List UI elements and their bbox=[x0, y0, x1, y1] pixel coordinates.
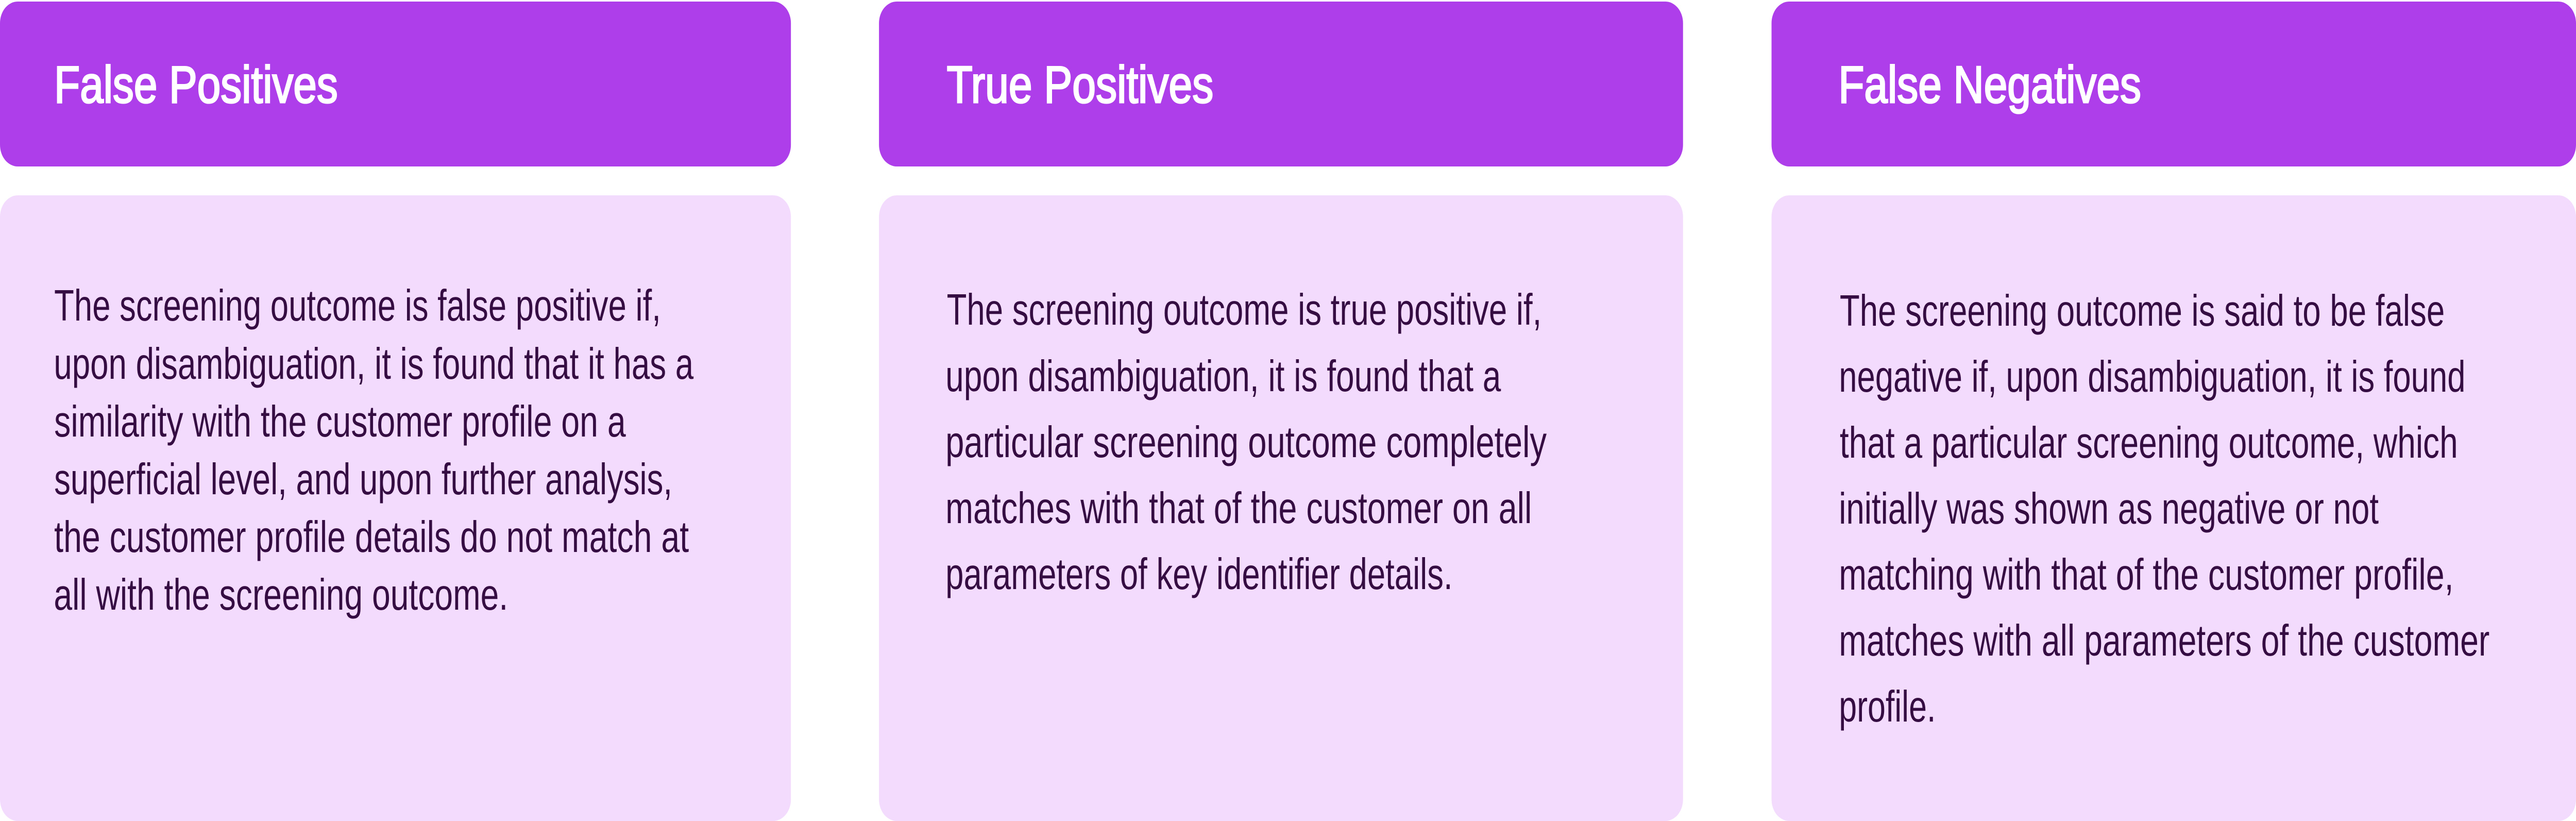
body text: False Positives bbox=[54, 282, 694, 619]
heading: False Positives: False Positives bbox=[54, 55, 338, 114]
body text: True Positives: matches with that of the customer on all bbox=[945, 484, 1532, 533]
panel: False Negatives bbox=[1772, 2, 2576, 821]
header bar: False Negatives bbox=[1772, 2, 2576, 166]
panel: False Positives bbox=[0, 2, 791, 821]
heading: True Positives: True Positives bbox=[947, 55, 1213, 114]
body text: True Positives: upon disambiguation, it is found that a bbox=[945, 353, 1501, 401]
body text: True Positives: The screening outcome is true positive if, bbox=[947, 286, 1541, 334]
panel: True Positives bbox=[879, 2, 1683, 821]
header bar: True Positives bbox=[879, 2, 1683, 166]
body text: False Positives: upon disambiguation, it is found that it has a bbox=[54, 340, 694, 389]
body text: False Positives: superficial level, and upon further analysis, bbox=[54, 456, 672, 504]
body text: False Positives: all with the screening outcome. bbox=[54, 571, 508, 619]
body card: False Positives bbox=[0, 195, 791, 821]
body text: False Negatives: The screening outcome is said to be false bbox=[1840, 287, 2445, 336]
body text: False Positives: the customer profile details do not match at bbox=[54, 513, 689, 562]
body text: False Negatives: matches with all parameters of the customer bbox=[1839, 617, 2489, 665]
body text: False Negatives: that a particular screening outcome, which bbox=[1840, 419, 2458, 467]
body text: True Positives: parameters of key identifier details. bbox=[945, 550, 1453, 599]
body card: False Negatives bbox=[1772, 195, 2576, 821]
body text: False Positives: The screening outcome is false positive if, bbox=[54, 282, 661, 330]
body text: False Negatives: negative if, upon disambiguation, it is found bbox=[1839, 353, 2466, 401]
body text: False Negatives: matching with that of the customer profile, bbox=[1839, 551, 2453, 599]
header bar: False Positives bbox=[0, 2, 791, 166]
body text: False Negatives: profile. bbox=[1839, 683, 1936, 731]
body text: False Negatives bbox=[1839, 287, 2489, 731]
body text: True Positives bbox=[945, 286, 1547, 599]
body text: False Positives: similarity with the customer profile on a bbox=[54, 398, 626, 446]
body text: False Negatives: initially was shown as negative or not bbox=[1839, 485, 2379, 533]
body text: True Positives: particular screening outcome completely bbox=[945, 418, 1547, 467]
heading: False Negatives: False Negatives bbox=[1838, 55, 2141, 114]
body card: True Positives bbox=[879, 195, 1683, 821]
